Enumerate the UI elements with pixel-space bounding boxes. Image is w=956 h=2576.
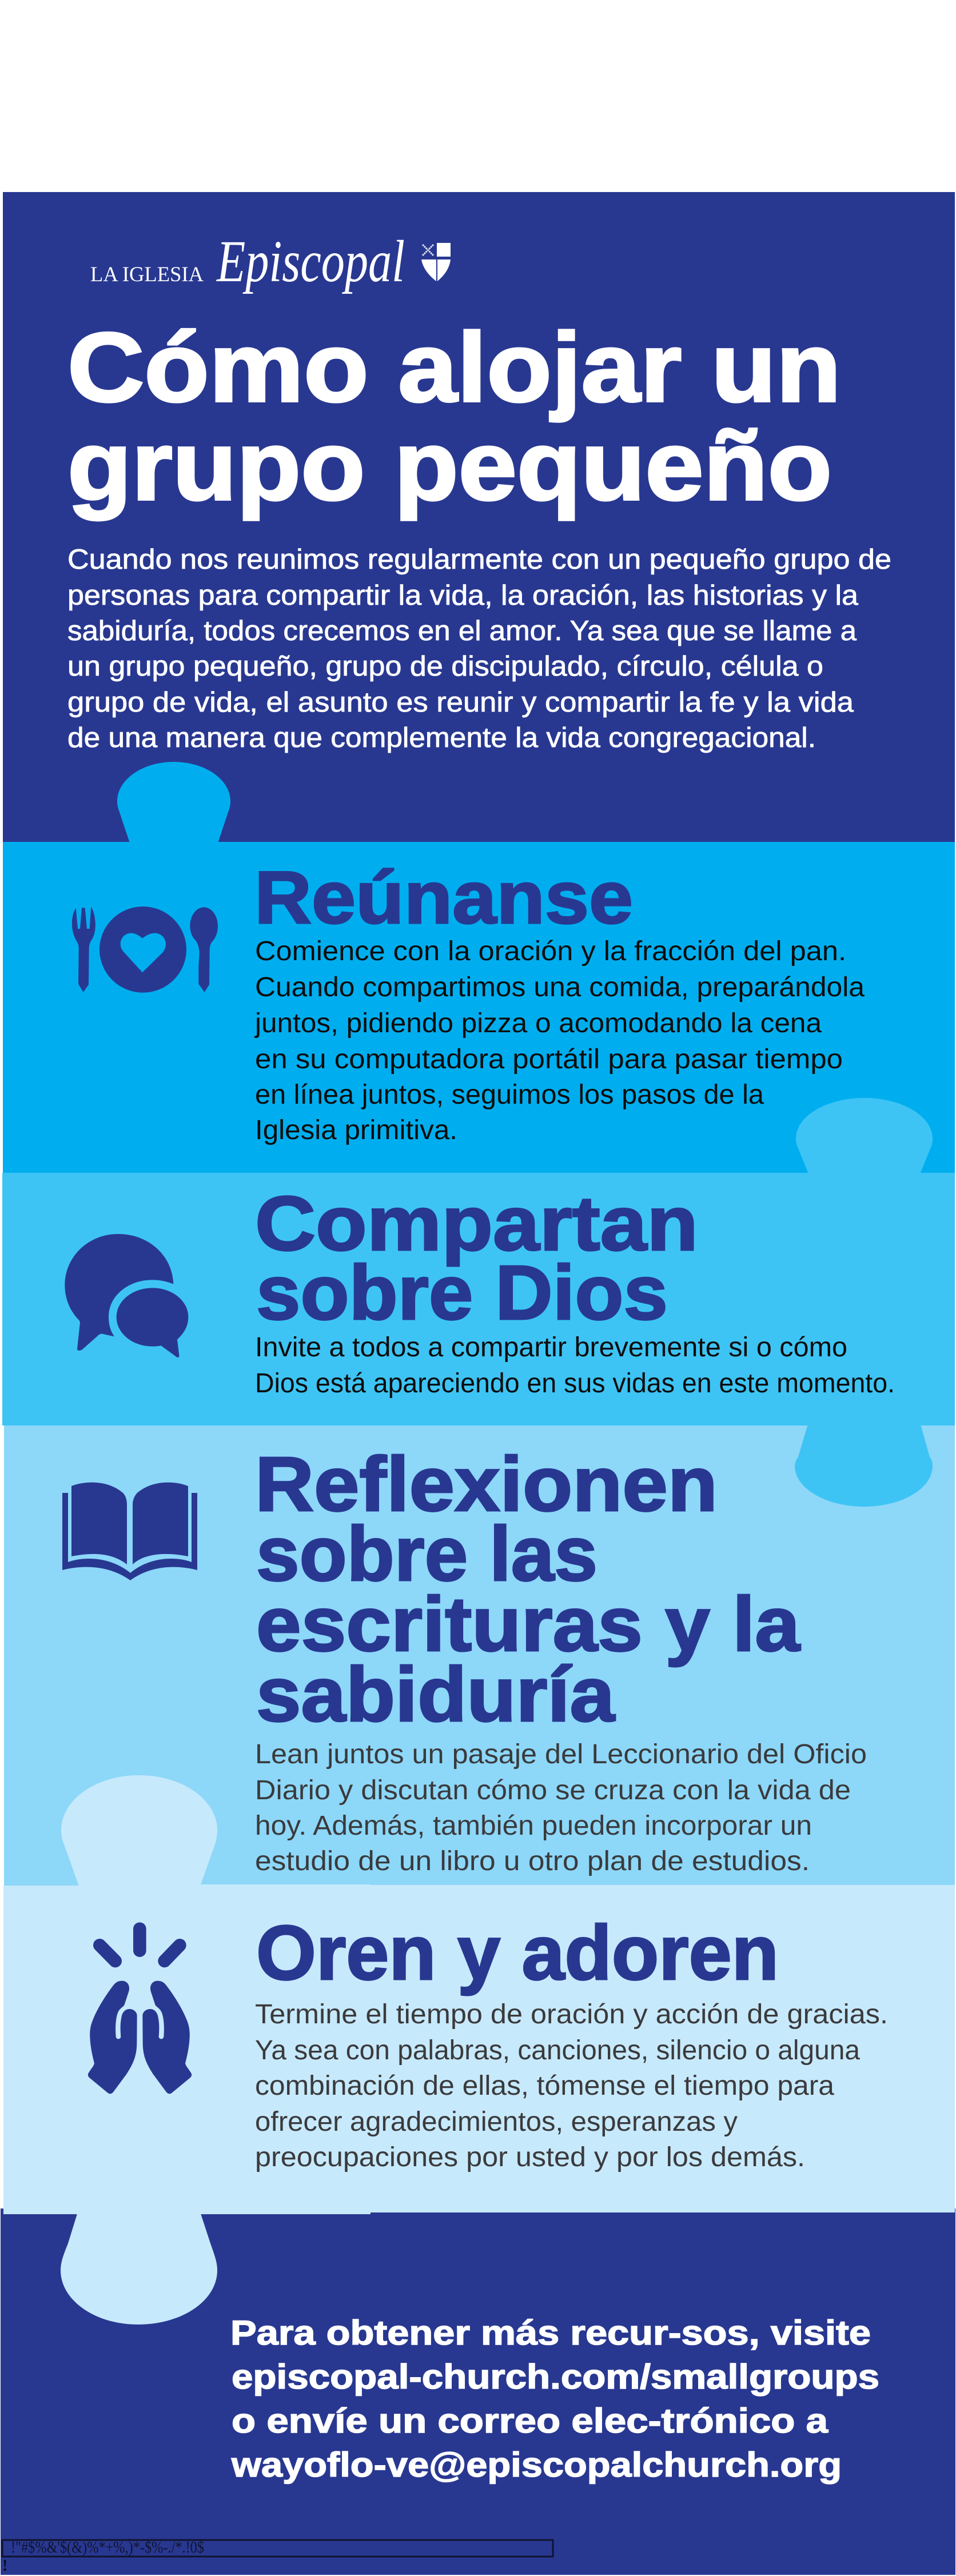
- heading: [255, 1180, 698, 1336]
- footer call to action: episcopal-church.com/smallgroups: [232, 2358, 879, 2396]
- intro text: [67, 544, 891, 753]
- footer call to action: wayoflo-ve@episcopalchurch.org: [231, 2446, 842, 2484]
- footer call to action: o envíe un correo elec-trónico a: [232, 2402, 828, 2440]
- body text: [254, 936, 865, 1145]
- puzzle tab: bottom: [61, 2212, 217, 2325]
- body text: [255, 1739, 867, 1876]
- panel: Reúnanse: [3, 762, 955, 1173]
- title: [67, 313, 841, 521]
- heading: sabiduría: [256, 1651, 615, 1738]
- panel: footer background: [1, 2208, 955, 2575]
- heading: escrituras y la: [256, 1581, 800, 1667]
- logo: [90, 229, 451, 294]
- puzzle tab: top: [61, 1775, 217, 1886]
- title: Cómo alojar un: [67, 313, 841, 422]
- intro text: de una manera que complemente la vida congregacional.: [67, 722, 816, 753]
- body text: combinación de ellas, tómense el tiempo para: [255, 2071, 834, 2101]
- heading: Reflexionen: [255, 1441, 718, 1527]
- overset text box: [2, 2539, 553, 2575]
- icon: open book: [62, 1483, 197, 1580]
- puzzle tab: cyan: [117, 762, 230, 843]
- body text: juntos, pidiendo pizza o acomodando la cena: [254, 1008, 822, 1039]
- panel: intro: [3, 192, 955, 844]
- footer call to action: Para obtener más recur-sos, visite: [230, 2314, 871, 2352]
- heading: Reúnanse: [254, 856, 633, 939]
- body text: en línea juntos, seguimos los pasos de la: [255, 1080, 764, 1110]
- body text: Diario y discutan cómo se cruza con la vida de: [255, 1775, 851, 1806]
- panel: Compartan sobre Dios: [2, 1098, 955, 1425]
- intro text: Cuando nos reunimos regularmente con un pequeño grupo de: [67, 544, 891, 575]
- body text: preocupaciones por usted y por los demás.: [255, 2142, 805, 2172]
- footer call to action: [230, 2314, 879, 2484]
- body text: Comience con la oración y la fracción del pan.: [255, 936, 846, 967]
- body text: estudio de un libro u otro plan de estudios.: [255, 1846, 810, 1876]
- logo: LA IGLESIA: [90, 263, 204, 286]
- heading: [255, 1441, 800, 1738]
- puzzle tab: lower: [795, 1424, 933, 1507]
- body text: hoy. Además, también pueden incorporar un: [255, 1811, 812, 1841]
- body text: Invite a todos a compartir brevemente si o cómo: [255, 1332, 847, 1363]
- body text: [255, 1332, 895, 1399]
- intro text: un grupo pequeño, grupo de discipulado, círculo, célula o: [67, 651, 823, 682]
- body text: Iglesia primitiva.: [255, 1115, 457, 1145]
- body text: [255, 1999, 888, 2172]
- body text: Ya sea con palabras, canciones, silencio o alguna: [255, 2035, 860, 2066]
- intro text: personas para compartir la vida, la oración, las historias y la: [67, 580, 859, 611]
- overset text box: !"#$%&'$(&)%*+%,)*-$%-./*.!0$: [11, 2539, 204, 2557]
- intro text: sabiduría, todos crecemos en el amor. Ya sea que se llame a: [67, 616, 857, 646]
- icon: praying hands: [88, 1929, 192, 2094]
- heading: Oren y adoren: [256, 1910, 779, 1996]
- body text: Lean juntos un pasaje del Leccionario del Oficio: [255, 1739, 867, 1770]
- panel: Oren y adoren: [3, 1775, 955, 2325]
- puzzle tab: upper: [796, 1098, 933, 1174]
- heading: Compartan: [255, 1180, 698, 1267]
- body text: en su computadora portátil para pasar tiempo: [255, 1044, 843, 1075]
- intro text: grupo de vida, el asunto es reunir y compartir la fe y la vida: [67, 687, 854, 718]
- body text: Termine el tiempo de oración y acción de gracias.: [255, 1999, 888, 2030]
- overset text box: !: [2, 2557, 7, 2575]
- body text: Cuando compartimos una comida, preparándola: [255, 972, 865, 1003]
- logo: Episcopal: [216, 229, 405, 294]
- title: grupo pequeño: [67, 411, 832, 521]
- icon: speech bubbles: [65, 1234, 188, 1357]
- heading: sobre Dios: [256, 1249, 668, 1336]
- icon: plate, fork and spoon: [72, 906, 218, 993]
- body text: Dios está apareciendo en sus vidas en este momento.: [255, 1368, 895, 1399]
- panel: Reflexionen: [4, 1424, 955, 1886]
- heading: sobre las: [256, 1511, 598, 1597]
- body text: ofrecer agradecimientos, esperanzas y: [255, 2107, 738, 2137]
